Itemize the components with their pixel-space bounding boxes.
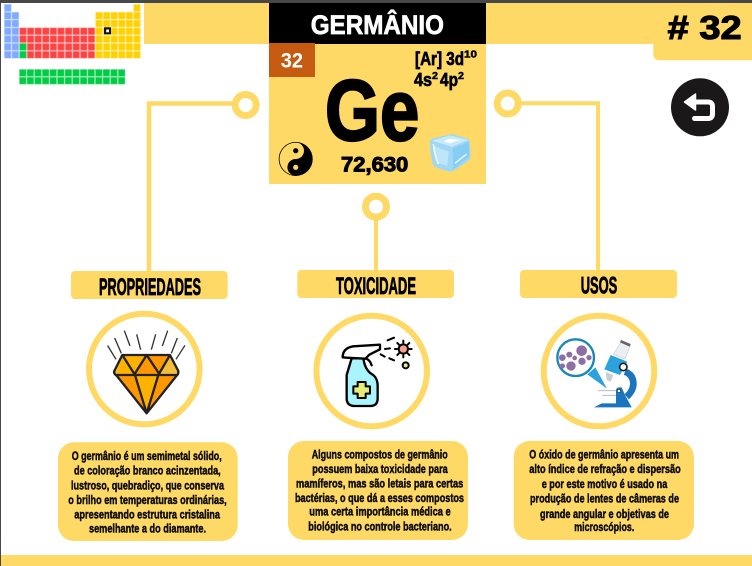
heading: usos	[520, 270, 677, 300]
heading: usos: USOS	[581, 272, 617, 300]
icon: ice cube solid state	[430, 134, 471, 172]
electron configuration: 4p	[440, 70, 458, 90]
text: usos: O óxido de germânio apresenta um	[529, 448, 679, 462]
text: propriedades	[58, 442, 238, 541]
text: propriedades: O germânio é um semimetal sólido,	[72, 449, 222, 463]
connector: toxicidade	[366, 196, 386, 270]
text: usos: e por este motivo é usado na	[542, 477, 668, 491]
text: toxicidade: possuem baixa toxicidade para	[312, 462, 448, 476]
text: toxicidade: uma certa importância médica e	[309, 505, 451, 519]
card title bar	[269, 3, 486, 44]
electron configuration: [Ar] 3d	[415, 49, 464, 69]
electron configuration: 10	[464, 48, 477, 60]
electron configuration: 4s	[414, 70, 432, 90]
icon: yin yang semimetal	[279, 142, 312, 176]
bottom yellow band	[1, 555, 752, 566]
text: propriedades: semelhante a do diamante.	[89, 522, 206, 536]
element name: GERMÂNIO	[311, 9, 444, 40]
atomic number	[269, 43, 315, 77]
text: toxicidade: biológica no controle bacteriano.	[308, 520, 452, 534]
text: toxicidade: mamíferos, mas são letais para certas	[296, 477, 464, 491]
text: toxicidade: Alguns compostos de germânio	[312, 447, 448, 461]
element symbol: Ge	[325, 63, 419, 159]
icon: back button	[671, 78, 729, 136]
connector: usos	[497, 93, 598, 270]
text: propriedades: o brilho em temperaturas ordinárias,	[68, 493, 227, 507]
icon: spray bottle	[316, 316, 427, 426]
text: propriedades: apresentando estrutura cristalina	[74, 508, 220, 522]
text: toxicidade: bactérias, o que dá a esses compostos	[295, 491, 464, 505]
text: usos: microscópios.	[574, 520, 634, 534]
icon: diamond	[89, 314, 200, 424]
top yellow band	[144, 3, 752, 44]
icon: microscope	[544, 316, 654, 426]
heading: propriedades	[71, 271, 228, 301]
atomic mass: 72,630	[341, 154, 408, 177]
panel: toxicidade	[288, 270, 468, 540]
text: usos	[514, 441, 694, 540]
periodic table locator	[4, 4, 141, 85]
connector: propriedades	[149, 94, 256, 271]
atomic number: 32	[281, 50, 303, 72]
electron configuration: 2	[458, 70, 464, 82]
heading: propriedades: PROPRIEDADES	[99, 274, 201, 301]
electron configuration	[414, 48, 477, 90]
text: usos: produção de lentes de câmeras de	[530, 492, 679, 506]
panel: usos	[514, 270, 694, 540]
electron configuration: 2	[432, 70, 438, 82]
heading: toxicidade	[297, 270, 454, 300]
text: usos: grande angular e objetivas de	[540, 507, 669, 521]
element number tab	[653, 9, 752, 60]
element card	[269, 3, 486, 184]
text: usos: alto índice de refração e dispersão	[529, 462, 681, 476]
text: propriedades: lustroso, quebradiço, que conserva	[71, 478, 224, 492]
element number tab: # 32	[668, 9, 742, 46]
heading: toxicidade: TOXICIDADE	[336, 273, 416, 300]
text: propriedades: de coloração branco acinzentada,	[74, 464, 221, 478]
text: toxicidade	[288, 441, 468, 540]
panel: propriedades	[58, 271, 238, 541]
card body	[269, 44, 486, 184]
